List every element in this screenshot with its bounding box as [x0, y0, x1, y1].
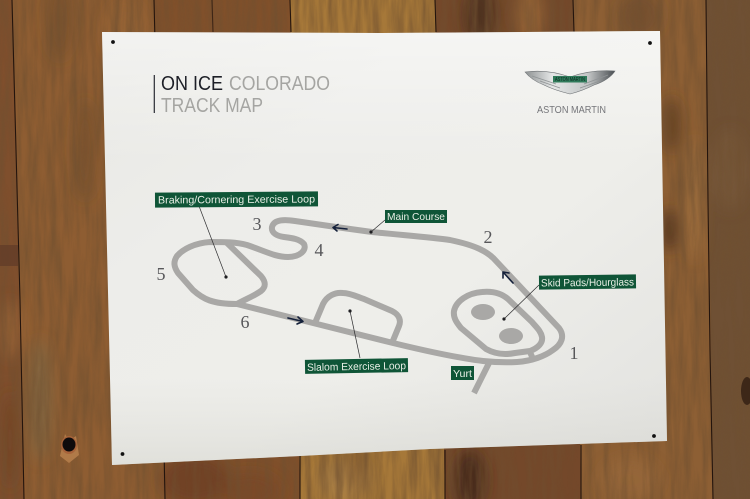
- title: ON ICE: [161, 73, 223, 95]
- corner numbers: 4: [314, 240, 324, 260]
- title: [154, 73, 330, 117]
- label: skid pads/hourglass: Skid Pads/Hourglass: [541, 276, 634, 290]
- poster board: [102, 31, 667, 465]
- track map: [174, 220, 562, 393]
- corner numbers: 3: [252, 214, 262, 234]
- leader lines: [199, 206, 539, 358]
- label: main course: Main Course: [387, 211, 445, 223]
- corner numbers: [156, 214, 578, 363]
- yurt access road: [474, 363, 489, 393]
- skid pad connector: [530, 352, 533, 359]
- corner numbers: 1: [570, 343, 578, 363]
- main course track: [174, 220, 562, 362]
- label: yurt: Yurt: [453, 368, 472, 380]
- knot dark patch on right plank: [741, 377, 750, 405]
- knot hole in wood: [60, 434, 79, 463]
- braking exercise loop: [227, 243, 265, 304]
- slalom exercise loop: [315, 293, 400, 343]
- Aston Martin logo: ASTON MARTIN: [555, 77, 585, 83]
- Aston Martin logo: [525, 71, 615, 116]
- label: slalom exercise loop: Slalom Exercise Loop: [307, 360, 406, 374]
- skid pad circles: [471, 304, 523, 344]
- Aston Martin logo: ASTON MARTIN: [537, 104, 606, 116]
- title: TRACK MAP: [161, 95, 263, 117]
- skid pad loop: [454, 292, 542, 354]
- label: braking/cornering exercise loop: Braking/Cornering Exercise Loop: [158, 193, 315, 207]
- corner numbers: 2: [484, 227, 492, 247]
- title: COLORADO: [229, 73, 330, 95]
- label: yurt: [451, 366, 474, 380]
- mounting holes: [111, 40, 656, 456]
- direction arrows: [288, 224, 513, 324]
- corner numbers: 5: [156, 264, 166, 284]
- corner numbers: 6: [240, 312, 250, 332]
